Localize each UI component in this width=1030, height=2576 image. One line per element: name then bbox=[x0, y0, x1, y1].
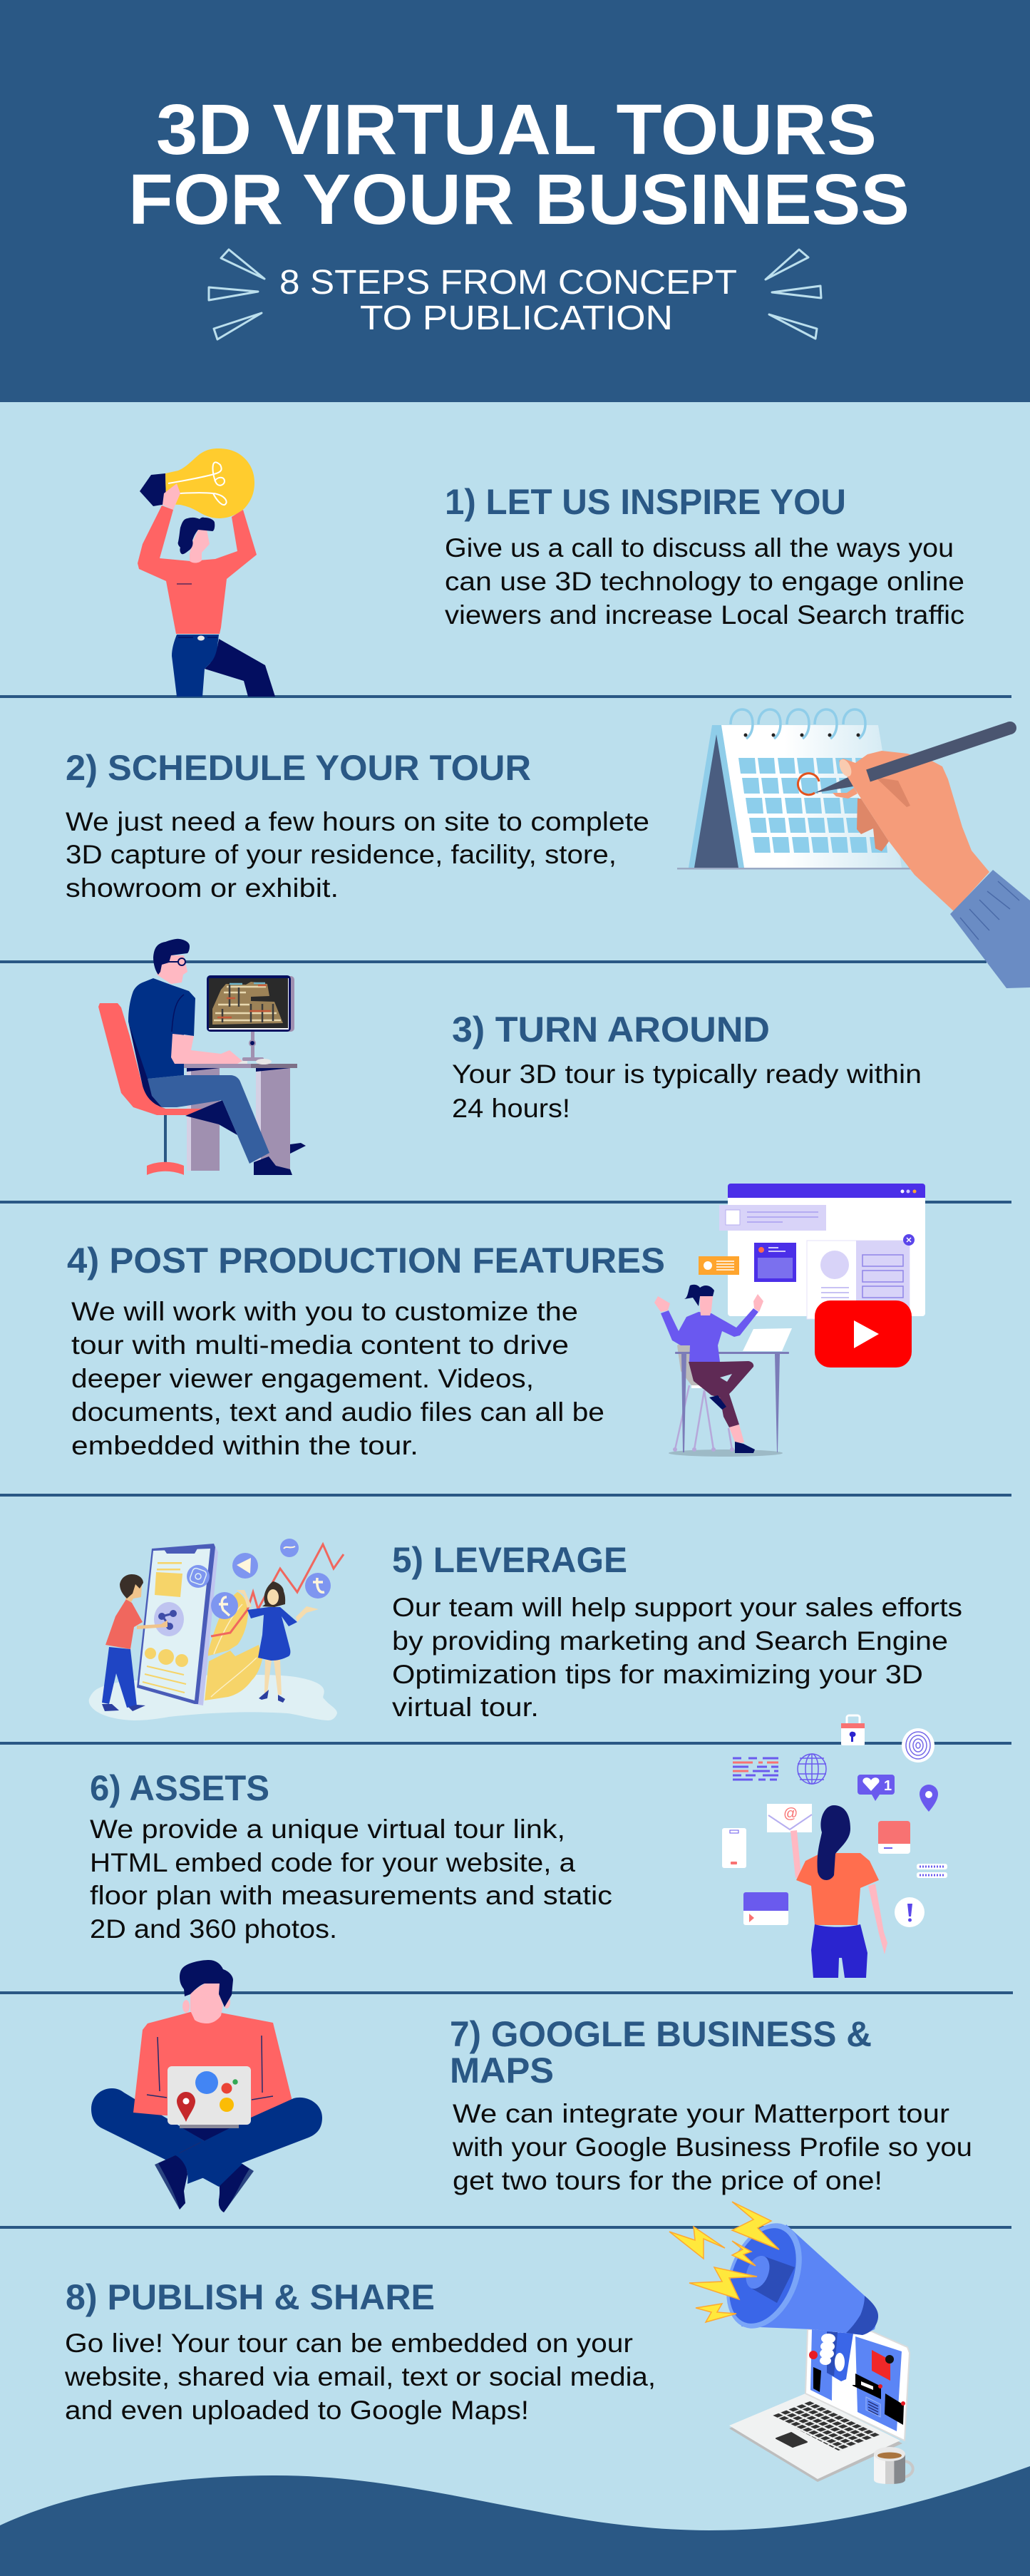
text block: with your Google Business Profile so you bbox=[452, 2133, 972, 2162]
icon: lightning bolts bbox=[669, 2202, 779, 2322]
footer wave bbox=[0, 2466, 1030, 2576]
text block: We will work with you to customize the bbox=[71, 1297, 578, 1326]
icon: man lifting light bulb bbox=[138, 448, 275, 697]
heading: MAPS bbox=[450, 2051, 554, 2090]
text block bbox=[445, 533, 964, 630]
panel: step 2 bbox=[66, 709, 1030, 988]
text block: virtual tour. bbox=[392, 1693, 539, 1722]
text block: by providing marketing and Search Engine bbox=[392, 1626, 948, 1656]
text block: showroom or exhibit. bbox=[66, 873, 339, 903]
text block: floor plan with measurements and static bbox=[90, 1881, 612, 1910]
icon: like notification: 1 bbox=[884, 1778, 892, 1794]
icon: video play button bbox=[815, 1300, 912, 1367]
text block: embedded within the tour. bbox=[71, 1431, 418, 1460]
text block: We provide a unique virtual tour link, bbox=[90, 1815, 565, 1844]
text block: 3D capture of your residence, facility, store, bbox=[66, 840, 617, 869]
subtitle: TO PUBLICATION bbox=[360, 299, 673, 337]
panel: step 7 bbox=[91, 1960, 972, 2212]
text block: HTML embed code for your website, a bbox=[90, 1848, 575, 1877]
icon: coffee mug bbox=[874, 2447, 913, 2484]
icon: like notification bbox=[858, 1775, 895, 1801]
panel: step 5 bbox=[89, 1539, 962, 1722]
text block: tour with multi-media content to drive bbox=[71, 1330, 569, 1360]
text block: get two tours for the price of one! bbox=[453, 2166, 882, 2195]
icon: social media phone with two people bbox=[89, 1539, 344, 1720]
text block: deeper viewer engagement. Videos, bbox=[71, 1364, 534, 1393]
text block bbox=[66, 807, 649, 903]
heading: 1) LET US INSPIRE YOU bbox=[445, 482, 846, 522]
heading: 8) PUBLISH & SHARE bbox=[66, 2277, 435, 2317]
panel: step 4 bbox=[67, 1184, 925, 1460]
text block: We just need a few hours on site to complete bbox=[66, 807, 649, 836]
text block: We can integrate your Matterport tour bbox=[453, 2099, 949, 2128]
text block: 2D and 360 photos. bbox=[90, 1914, 337, 1944]
panel: step 6 bbox=[90, 1715, 947, 1978]
icon: calendar and hand with pen bbox=[677, 709, 1030, 988]
heading bbox=[450, 2014, 872, 2090]
text block bbox=[452, 1059, 922, 1123]
icon: web window and woman at desk bbox=[654, 1184, 925, 1457]
text block: and even uploaded to Google Maps! bbox=[65, 2396, 529, 2425]
heading: 2) SCHEDULE YOUR TOUR bbox=[66, 748, 531, 788]
title: 3D VIRTUAL TOURS bbox=[156, 90, 877, 170]
heading: 5) LEVERAGE bbox=[392, 1540, 627, 1580]
icon: man at desk with 3D floor plan on monitor bbox=[98, 939, 306, 1175]
title bbox=[128, 90, 910, 240]
panel: step 3 bbox=[98, 939, 922, 1175]
heading: 7) GOOGLE BUSINESS & bbox=[450, 2014, 872, 2054]
title: FOR YOUR BUSINESS bbox=[128, 160, 910, 240]
text block bbox=[90, 1815, 612, 1944]
text block: Your 3D tour is typically ready within bbox=[452, 1059, 922, 1089]
icon: woman surrounded by digital assets: @ bbox=[783, 1806, 798, 1822]
text block bbox=[392, 1593, 962, 1722]
text block: Optimization tips for maximizing your 3D bbox=[392, 1660, 923, 1689]
icon: left burst rays bbox=[209, 250, 264, 339]
heading: 3) TURN AROUND bbox=[452, 1010, 770, 1050]
text block bbox=[71, 1297, 604, 1460]
text block bbox=[452, 2099, 972, 2195]
panel: step 1 bbox=[138, 448, 964, 697]
subtitle: 8 STEPS FROM CONCEPT bbox=[279, 264, 737, 302]
subtitle bbox=[279, 264, 737, 337]
heading: 4) POST PRODUCTION FEATURES bbox=[67, 1241, 665, 1281]
text block: Go live! Your tour can be embedded on your bbox=[65, 2329, 633, 2358]
icon: megaphone and laptop bbox=[669, 2202, 913, 2484]
panel: step 8 bbox=[64, 2202, 913, 2484]
icon: right burst rays bbox=[766, 250, 821, 339]
text block: viewers and increase Local Search traffic bbox=[445, 600, 964, 630]
text block: Our team will help support your sales efforts bbox=[392, 1593, 962, 1622]
icon: seated man with laptop showing Google logo dots bbox=[91, 1960, 322, 2212]
header band bbox=[0, 0, 1030, 402]
text block: can use 3D technology to engage online bbox=[445, 567, 964, 596]
text block: website, shared via email, text or social media, bbox=[64, 2362, 656, 2391]
text block: documents, text and audio files can all be bbox=[71, 1397, 604, 1427]
text block bbox=[64, 2329, 656, 2425]
icon: woman surrounded by digital assets bbox=[722, 1715, 947, 1978]
text block: Give us a call to discuss all the ways you bbox=[445, 533, 954, 563]
text block: 24 hours! bbox=[452, 1094, 570, 1123]
heading: 6) ASSETS bbox=[90, 1768, 269, 1808]
